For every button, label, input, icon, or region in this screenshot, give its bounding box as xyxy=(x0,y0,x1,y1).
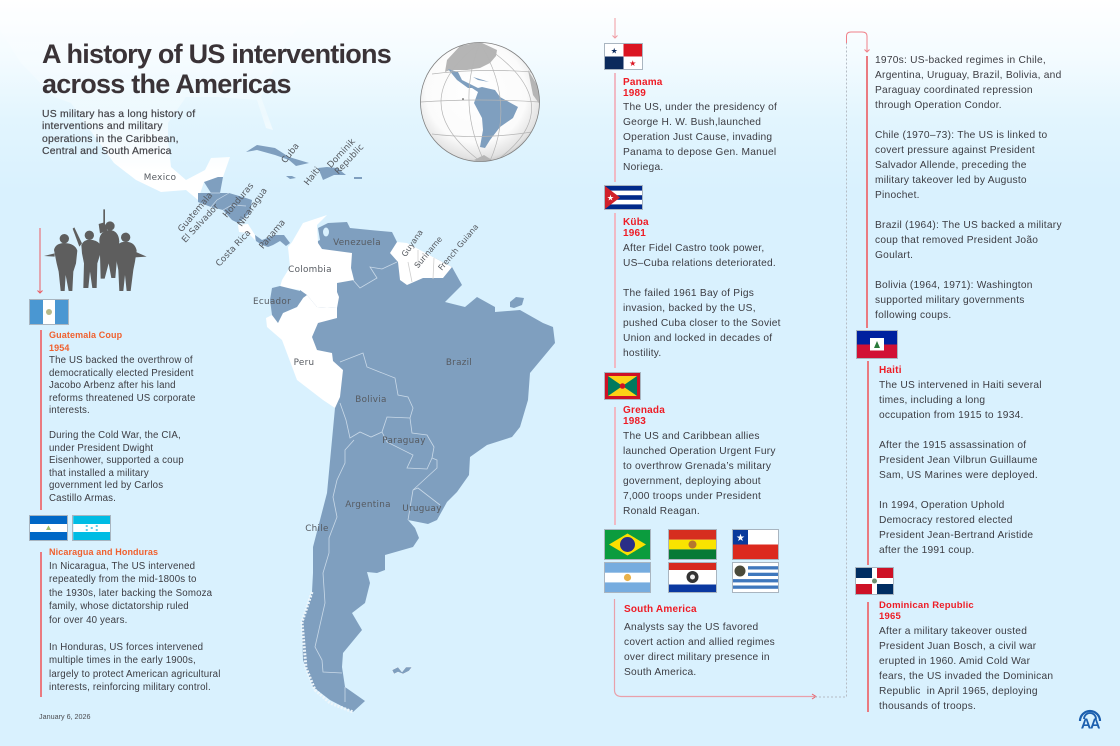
text: 1970s regimes: 1970s: US-backed regimes in Chile, Argentina, Uruguay, Brazil, Bolivia, and Paraguay coordinated repression through Operation Condor. Chile (1970–73): The US is linked to covert pressure against President Salvador Allende, preceding the military takeover led by Augusto Pinochet. Brazil (1964): The US backed a military coup that removed President João Goulart. Bolivia (1964, 1971): Washington supported military governments following coups. xyxy=(875,54,1062,320)
Caribbean islands xyxy=(246,145,362,180)
text: Panama: The US, under the presidency of George H. W. Bush,launched Operation Just Cause, invading Panama to depose Gen. Manuel Noriega. xyxy=(623,102,777,172)
map labels: Ecuador xyxy=(253,297,291,307)
flag: Panama: ★ xyxy=(629,59,636,68)
flag: Panama: ★ xyxy=(611,46,618,56)
Falkland Islands xyxy=(392,667,412,674)
text: Grenada: The US and Caribbean allies launched Operation Urgent Fury to overthrow Grenada’s military government, deploying about 7,000 troops under President Ronald Reagan. xyxy=(623,430,776,516)
globe locator xyxy=(420,42,540,162)
map labels: Brazil xyxy=(446,358,472,368)
text: South America: Analysts say the US favored covert action and allied regimes over direct military presence in South America. xyxy=(624,622,775,678)
heading: Kuba 1961: Küba 1961 xyxy=(623,216,649,238)
flag: Haiti xyxy=(856,330,898,359)
flag: Cuba: ★ xyxy=(607,194,614,202)
Ecuador xyxy=(270,286,303,323)
map labels: Suriname xyxy=(413,235,444,270)
flags: South American countries xyxy=(604,529,779,593)
arrow: start of left column xyxy=(37,228,43,294)
flag: Chile: ★ xyxy=(736,533,745,544)
heading: South America: South America xyxy=(624,604,697,614)
flag: Bolivia xyxy=(668,529,717,560)
title: A history of US interventions across the Americas xyxy=(42,39,391,98)
flag: Grenada xyxy=(604,372,641,400)
map labels: French Guiana xyxy=(436,222,480,272)
map labels: Guatemala xyxy=(176,191,215,234)
map labels xyxy=(144,136,480,534)
heading: Panama 1989: Panama 1989 xyxy=(623,76,663,98)
map labels: Dominik xyxy=(326,136,358,170)
map labels: Chile xyxy=(305,524,329,534)
Lake Maracaibo xyxy=(323,228,329,236)
Marajo island xyxy=(510,297,524,308)
heading: Guatemala Coup: Guatemala Coup 1954 xyxy=(49,330,122,352)
map labels: Paraguay xyxy=(382,436,426,446)
text: Dominican Republic: After a military takeover ousted President Juan Bosch, a civil war erupted in 1960. Amid Cold War fears, the US invaded the Dominican Republic in April 1965, deploying thousands of troops. xyxy=(879,626,1053,712)
flag: Brazil xyxy=(604,529,651,560)
heading: Haiti: Haiti xyxy=(879,364,902,376)
map labels: Panama xyxy=(258,218,288,251)
map labels: Honduras xyxy=(221,181,256,220)
text: Guatemala: The US backed the overthrow of democratically elected President Jacobo Arbenz after his land reforms threatened US corporate interests. During the Cold War, the CIA, under President Dwight Eisenhower, supported a coup that installed a military government led by Carlos Castillo Armas. xyxy=(49,355,196,504)
dotted connector between columns xyxy=(815,32,870,698)
text: Cuba: After Fidel Castro took power, US–Cuba relations deteriorated. The failed 1961 Bay of Pigs invasion, backed by the US, pushed Cuba closer to the Soviet Union and locked in decades of hostility. xyxy=(623,242,781,358)
timeline connector xyxy=(614,599,817,700)
map labels: Haiti xyxy=(303,166,323,188)
Chilean fjords xyxy=(302,592,353,712)
Central America xyxy=(198,177,290,247)
flag: Dominican Republic xyxy=(855,567,894,595)
text: Haiti: The US intervened in Haiti several times, including a long occupation from 1915 to 1934. After the 1915 assassination of President Jean Vilbrun Guillaume Sam, US Marines were deployed. In 1994, Operation Uphold Democracy restored elected President Jean-Bertrand Aristide after the 1991 coup. xyxy=(879,380,1042,556)
North America and Mexico landmass xyxy=(0,0,332,200)
heading: Grenada 1983: Grenada 1983 xyxy=(623,404,665,426)
panel: Panama xyxy=(604,43,777,182)
icon: soldiers silhouette xyxy=(44,209,146,291)
panel: Cuba xyxy=(604,185,781,368)
flag: Argentina xyxy=(604,562,651,593)
map labels: Guyana xyxy=(400,228,425,259)
South America base land xyxy=(300,222,555,712)
map labels: Argentina xyxy=(345,500,391,510)
flag: Chile xyxy=(732,529,779,560)
flag: Guatemala xyxy=(29,299,69,325)
heading: Dominican Republic 1965: Dominican Republic 1965 xyxy=(879,600,974,622)
borders xyxy=(315,250,440,702)
logo: AA xyxy=(1078,710,1102,730)
map labels: Costa Rica xyxy=(214,228,253,269)
panel: Grenada xyxy=(604,372,776,525)
panel: Nicaragua and Honduras xyxy=(29,515,221,697)
Guianas xyxy=(390,242,452,285)
map labels: Cuba xyxy=(280,142,302,166)
flag: Cuba xyxy=(604,185,643,210)
heading: Nicaragua and Honduras: Nicaragua and Honduras xyxy=(49,546,158,556)
map labels: El Salvador xyxy=(180,202,221,245)
map labels: Republic xyxy=(333,142,366,177)
flag: Uruguay xyxy=(732,562,779,593)
map labels: Bolivia xyxy=(355,395,387,405)
flag: Paraguay xyxy=(668,562,717,593)
flag: Nicaragua xyxy=(29,515,68,541)
map labels: Mexico xyxy=(144,173,176,183)
panel: Dominican Republic xyxy=(855,567,1053,712)
date: January 6, 2026 xyxy=(39,712,91,721)
text: Nicaragua and Honduras: In Nicaragua, The US intervened repeatedly from the mid-1800s to the 1930s, later backing the Somoza family, whose dictatorship ruled for over 40 years. In Honduras, US forces intervened multiple times in the early 1900s, largely to protect American agricultural interests, reinforcing military control. xyxy=(49,561,221,693)
panel: Guatemala xyxy=(29,299,196,510)
Peru xyxy=(266,295,343,408)
map labels: Venezuela xyxy=(333,238,381,248)
flag: Panama xyxy=(604,43,643,70)
panel: South America xyxy=(604,529,817,700)
map labels: Nicaragua xyxy=(236,186,270,229)
map labels: Colombia xyxy=(288,265,332,275)
panel: Haiti xyxy=(856,330,1042,565)
flag: Honduras xyxy=(72,515,111,541)
arrow: start of middle column xyxy=(612,18,618,39)
map labels: Uruguay xyxy=(402,504,442,514)
subtitle: US military has a long history of interventions and military operations in the Caribbean, Central and South America xyxy=(42,108,195,157)
Colombia xyxy=(280,215,354,308)
map labels: Peru xyxy=(294,358,314,368)
